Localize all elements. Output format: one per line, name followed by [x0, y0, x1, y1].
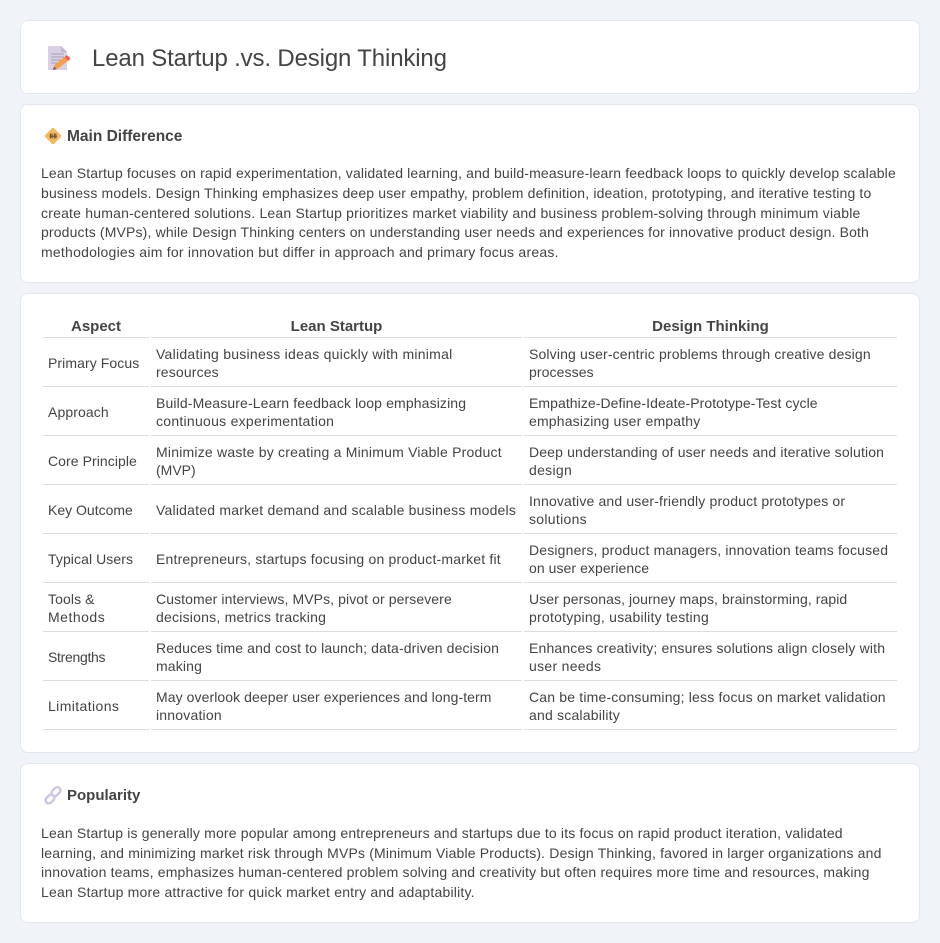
row: tools and methods: decisions, metrics tracking: [156, 609, 326, 625]
row: typical users: Designers, product managers, innovation teams focused: [529, 542, 888, 558]
table header: Lean Startup: [291, 318, 382, 335]
icon: memo with pencil: [48, 46, 70, 70]
text block: main difference: methodologies aim for innovation but differ in approach and primary focus areas.: [41, 244, 559, 260]
row: approach: Empathize-Define-Ideate-Prototype-Test cycle: [529, 395, 818, 411]
row: strengths: user needs: [529, 658, 601, 674]
heading: popularity: Popularity: [67, 787, 140, 804]
title: Lean Startup .vs. Design Thinking: [92, 45, 447, 72]
text block: popularity: [41, 825, 882, 900]
row: strengths: Enhances creativity; ensures solutions align closely with: [529, 640, 885, 656]
row: key outcome: Key Outcome: [48, 502, 133, 518]
row: primary focus: processes: [529, 364, 594, 380]
row: core principle: (MVP): [156, 462, 196, 478]
row: limitations: [43, 689, 897, 730]
row: core principle: Deep understanding of user needs and iterative solution: [529, 444, 884, 460]
row: primary focus: resources: [156, 364, 219, 380]
row: typical users: on user experience: [529, 560, 649, 576]
row: strengths: [43, 640, 897, 681]
text block: main difference: Lean Startup focuses on rapid experimentation, validated learning, and build-measure-learn feedback loops to quickly develop scalable: [41, 165, 896, 181]
row: key outcome: Validated market demand and scalable business models: [156, 502, 516, 518]
row: strengths: Reduces time and cost to launch; data-driven decision: [156, 640, 499, 656]
row: primary focus: Validating business ideas quickly with minimal: [156, 346, 452, 362]
row: core principle: design: [529, 462, 572, 478]
row: key outcome: [43, 493, 897, 534]
row: approach: Approach: [48, 404, 109, 420]
row: limitations: Limitations: [48, 698, 119, 714]
text block: main difference: [41, 165, 896, 260]
panel: header: [20, 20, 920, 94]
row: approach: emphasizing user empathy: [529, 413, 700, 429]
text block: main difference: create human-centered solutions. Lean Startup prioritizes market viability and business problem-solving through minimum viable: [41, 205, 861, 221]
row: strengths: making: [156, 658, 202, 674]
icon: chain link: [44, 786, 62, 805]
row: core principle: [43, 444, 897, 485]
row: limitations: and scalability: [529, 707, 620, 723]
row: limitations: Can be time-consuming; less focus on market validation: [529, 689, 886, 705]
row: core principle: Core Principle: [48, 453, 137, 469]
row: typical users: Entrepreneurs, startups focusing on product-market fit: [156, 551, 501, 567]
row: approach: [43, 395, 897, 436]
row: tools and methods: prototyping, usability testing: [529, 609, 709, 625]
row: limitations: innovation: [156, 707, 222, 723]
heading: main difference: Main Difference: [67, 128, 182, 145]
row: approach: continuous experimentation: [156, 413, 334, 429]
row: tools and methods: [43, 591, 897, 632]
row: typical users: Typical Users: [48, 551, 133, 567]
text block: popularity: learning, and minimizing market risk through MVPs (Minimum Viable Products). Design Thinking, favored in larger organizations and: [41, 845, 882, 861]
comparison table: [43, 318, 897, 730]
row: tools and methods: Methods: [48, 609, 105, 625]
icon: warning diamond: [44, 128, 62, 144]
text block: main difference: products (MVPs), while Design Thinking centers on understanding user needs and experiences for innovative product design. Both: [41, 224, 869, 240]
row: tools and methods: Tools &: [48, 591, 95, 607]
row: core principle: Minimize waste by creating a Minimum Viable Product: [156, 444, 502, 460]
row: primary focus: [43, 346, 897, 387]
panel: main difference: [20, 104, 920, 283]
row: strengths: Strengths: [48, 649, 105, 665]
row: typical users: [43, 542, 897, 583]
row: primary focus: Primary Focus: [48, 355, 139, 371]
text block: popularity: Lean Startup is generally more popular among entrepreneurs and startups due to its focus on rapid product iteration, validated: [41, 825, 843, 841]
row: key outcome: Innovative and user-friendly product prototypes or: [529, 493, 845, 509]
row: key outcome: solutions: [529, 511, 587, 527]
row: limitations: May overlook deeper user experiences and long-term: [156, 689, 492, 705]
text block: popularity: innovation teams, emphasizes human-centered problem solving and creativity but often requires more time and resources, making: [41, 864, 870, 880]
row: primary focus: Solving user-centric problems through creative design: [529, 346, 871, 362]
text block: main difference: business models. Design Thinking emphasizes deep user empathy, problem definition, ideation, prototyping, and iterative testing to: [41, 185, 871, 201]
row: approach: Build-Measure-Learn feedback loop emphasizing: [156, 395, 466, 411]
text block: popularity: Lean Startup more attractive for quick market entry and adaptability.: [41, 884, 475, 900]
table header: [43, 318, 897, 338]
table header: Aspect: [71, 318, 121, 335]
row: tools and methods: Customer interviews, MVPs, pivot or persevere: [156, 591, 452, 607]
panel: comparison table: [20, 293, 920, 753]
table header: Design Thinking: [652, 318, 769, 335]
panel: popularity: [20, 763, 920, 923]
row: tools and methods: User personas, journey maps, brainstorming, rapid: [529, 591, 847, 607]
